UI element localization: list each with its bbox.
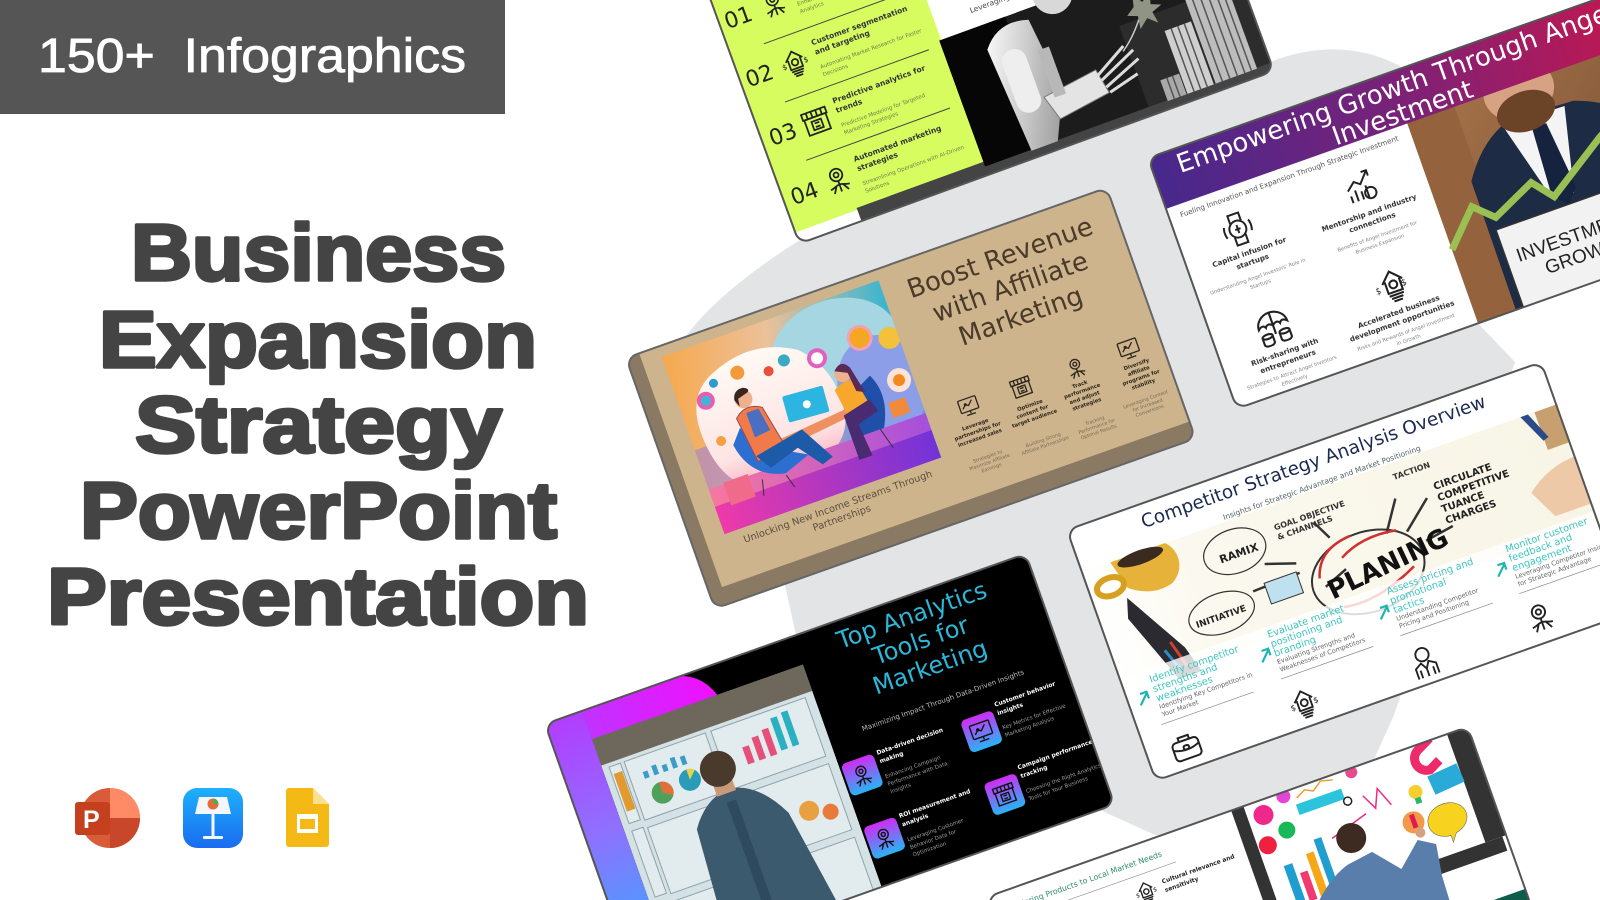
item: mentorship: Benefits of Angel Investment for	[1337, 220, 1419, 254]
item: evaluate market: positioning and	[1269, 615, 1344, 650]
row 02: Customer segmentation	[810, 4, 909, 47]
item: evaluate market: branding	[1273, 635, 1318, 660]
slide title: Boost Revenue	[903, 212, 1097, 305]
item: campaign performance	[981, 738, 1105, 816]
main title: Strategy	[135, 380, 503, 469]
subtitle: Maximizing Impact Through Data-Driven Insights	[861, 668, 1026, 733]
row 01	[725, 0, 824, 28]
column: leverage partnerships: increased sales	[957, 428, 1003, 449]
icon: Keynote	[183, 788, 243, 848]
column: track performance: strategies	[1072, 397, 1102, 413]
item: accelerated business	[1350, 270, 1455, 351]
row 04: Streamlining Operations with AI-Driven	[862, 145, 966, 187]
item: data driven decision: making	[879, 750, 905, 765]
photo: businessman with sign	[1407, 55, 1600, 322]
item: customer behavior: insights	[996, 701, 1025, 717]
row 03: Marketing Strategies	[843, 111, 899, 136]
column: track performance: and adjust	[1069, 390, 1101, 406]
row 04: Automated marketing	[852, 124, 943, 164]
item: evaluate market: Weaknesses of Competitors	[1279, 636, 1367, 674]
subtitle: Fueling Innovation and Expansion Through Strategic Investment	[1179, 134, 1400, 219]
column: optimize content	[1008, 375, 1069, 456]
slide: competitor strategy	[1067, 360, 1600, 781]
photo: planning sketch on desk: PLANING	[1323, 523, 1453, 606]
column: track performance: performance	[1063, 382, 1102, 401]
photo: planning sketch on desk: TUANCE	[1440, 490, 1486, 515]
item: campaign performance: Campaign performance	[1017, 739, 1093, 771]
item: identify competitor: weaknesses	[1155, 674, 1214, 704]
item: campaign performance: Tools for Your Business	[1027, 776, 1089, 803]
item: accelerated business: Accelerated business	[1357, 293, 1441, 330]
item: customer behavior	[958, 680, 1071, 753]
slide: tailoring products local market	[986, 724, 1557, 900]
column: diversify programs: Diversify	[1123, 358, 1151, 372]
column: optimize content: Affiliate Partnerships	[1021, 435, 1070, 457]
icon: PowerPoint	[75, 788, 140, 848]
item: accelerated business: development opportunities	[1348, 298, 1456, 344]
item: risk sharing: Strategies to Attract Angel Investors	[1247, 355, 1338, 392]
photo: planning sketch on desk: & CHANNELS	[1276, 514, 1334, 542]
item: assess pricing: Pricing and Positioning	[1398, 598, 1470, 630]
item: data driven decision: Insights	[890, 782, 912, 795]
row 02: Decisions	[822, 64, 849, 78]
item: data driven decision	[842, 728, 948, 796]
item: evaluate market	[1261, 605, 1374, 719]
photo: man drawing on whiteboard	[1230, 724, 1557, 900]
item: mentorship: Mentorship and industry	[1320, 192, 1418, 234]
row 02: Automating Market Research for Faster	[819, 28, 923, 71]
subtitle: Insights for Strategic Advantage and Market Positioning	[1222, 444, 1422, 522]
photo: robot with growth chart	[931, 0, 1271, 167]
row 04	[792, 126, 964, 204]
photo: planning sketch on desk: RAMIX	[1218, 540, 1261, 566]
column: diversify programs: for Increased	[1132, 397, 1164, 414]
item: mentorship	[1322, 169, 1417, 254]
item: identify competitor: Identifying Key Competitors in	[1158, 671, 1254, 711]
item: data driven decision: Data-driven decision	[876, 727, 944, 757]
item: assess pricing: Assess pricing and	[1385, 557, 1475, 597]
column: leverage partnerships: partnerships for	[954, 421, 1002, 443]
column: diversify programs: Conversions	[1135, 403, 1165, 419]
column: track performance: Track	[1072, 379, 1089, 390]
item: ROI measurement: Behavior Data for	[909, 829, 958, 851]
item: customer behavior: Marketing Analysis	[1004, 716, 1055, 739]
row 02	[746, 7, 921, 86]
row 04: 04	[787, 178, 822, 211]
slide title: Top Analytics	[832, 576, 990, 655]
column: optimize content: content for	[1016, 404, 1050, 421]
item: identify competitor: Your Market	[1160, 698, 1200, 719]
photo: planning sketch on desk	[1094, 404, 1593, 679]
header badge: 150+ Infographics	[38, 30, 466, 83]
row 03: trends	[835, 97, 864, 115]
item: monitor feedback: for Strategic Advantage	[1517, 555, 1593, 588]
item: cultural relevance: Cultural relevance and	[1161, 853, 1236, 885]
item: evaluate market: Evaluate market	[1266, 603, 1346, 641]
slide title: Competitor Strategy Analysis Overview	[1138, 392, 1489, 533]
column: track performance	[1064, 358, 1117, 440]
item: identify competitor	[1140, 646, 1254, 762]
item: cultural relevance: sensitivity	[1164, 876, 1200, 894]
illustration: two people at desk	[662, 276, 953, 534]
row 03: Predictive Modeling for Targeted	[841, 93, 926, 129]
slide title: Investment	[1328, 75, 1477, 152]
item: evaluate market: Evaluating Strengths and	[1276, 631, 1356, 666]
row 04: strategies	[856, 150, 900, 173]
item: monitor feedback: engagement	[1511, 543, 1573, 574]
item: mentorship: connections	[1348, 210, 1397, 235]
item: capital infusion: Startups	[1249, 278, 1272, 291]
column: diversify programs: programs for	[1122, 369, 1161, 388]
item: customer behavior: Customer behavior	[993, 681, 1056, 709]
column: diversify programs	[1116, 337, 1168, 416]
slide title: Tools for	[868, 611, 973, 671]
row 04: Solutions	[865, 180, 891, 195]
item: data driven decision: Enhancing Campaign	[884, 755, 942, 780]
item: cultural relevance	[1133, 851, 1239, 900]
row 01: 01	[721, 2, 756, 35]
item: assess pricing: promotional	[1389, 577, 1448, 607]
slide: boost revenue affiliate	[626, 188, 1196, 609]
background grey blob	[680, 49, 1515, 835]
item: data driven decision: Performance with Data	[887, 761, 949, 788]
item: assess pricing	[1380, 557, 1493, 680]
column: optimize content: target audience	[1011, 408, 1059, 430]
column: track performance: Tracking	[1084, 415, 1105, 428]
column: optimize content: Optimize	[1017, 398, 1044, 413]
photo: planning sketch on desk: INITIATIVE	[1195, 604, 1248, 631]
item: mentorship: Business Expansion	[1355, 233, 1405, 256]
column: diversify programs: stability	[1131, 378, 1157, 392]
column: leverage partnerships: Leverage	[961, 418, 990, 433]
slide title: with Affiliate	[929, 246, 1092, 329]
translucent lower panel	[1165, 512, 1597, 680]
main title: Business	[131, 208, 506, 297]
item: monitor feedback	[1497, 518, 1600, 632]
item: accelerated business: Risks and Rewards of Angel Investment	[1357, 313, 1456, 353]
item: campaign performance: Choosing the Right Analytics	[1025, 763, 1102, 795]
item: capital infusion: Understanding Angel Investors' Role in	[1210, 257, 1307, 297]
row 02: and targeting	[813, 28, 871, 57]
photo: planning sketch on desk: GOAL OBJECTIVE	[1273, 499, 1346, 532]
item: accelerated business: in Growth	[1396, 333, 1422, 347]
column: leverage partnerships	[954, 395, 1010, 472]
slide title: Marketing	[955, 281, 1087, 353]
column: leverage partnerships: Maximize Affiliate	[969, 453, 1011, 473]
item: monitor feedback: Monitor customer	[1504, 516, 1590, 555]
slide title: Marketing	[869, 634, 991, 700]
item: monitor feedback: feedback and	[1507, 532, 1574, 565]
illustration caption: Unlocking New Income Streams Through	[742, 469, 934, 546]
photo: planning sketch on desk: COMPETITIVE	[1436, 468, 1511, 504]
slide: angel investment	[1148, 0, 1600, 416]
icon: PowerPoint: P	[83, 806, 100, 834]
main title: Expansion	[99, 295, 537, 384]
item: capital infusion: startups	[1235, 252, 1270, 271]
header band	[1148, 0, 1600, 209]
column: track performance: Performance for	[1078, 417, 1116, 436]
row 02: 02	[742, 60, 777, 93]
slide: lime AI marketing	[707, 0, 1274, 244]
item: ROI measurement: ROI measurement and	[898, 788, 972, 820]
column: diversify programs: Leveraging Content	[1122, 389, 1169, 411]
item: ROI measurement: Optimization	[912, 841, 948, 859]
photo: planning sketch on desk: CIRCULATE	[1432, 462, 1494, 493]
photo: man viewing dashboards	[592, 664, 882, 900]
column: optimize content: Building Strong	[1025, 431, 1062, 449]
column: track performance: Optimal Results	[1080, 423, 1118, 442]
item: risk sharing: Risk-sharing with	[1250, 336, 1319, 368]
row 01: Analytics	[799, 1, 825, 15]
row 03: Predictive analytics for	[831, 63, 927, 105]
column: leverage partnerships: Strategies to	[972, 449, 1003, 465]
item: risk sharing: Effectively	[1281, 373, 1309, 388]
item: identify competitor: strengths and	[1151, 662, 1219, 695]
photo: planning sketch on desk: CHARGES	[1444, 499, 1498, 527]
item: customer behavior: Key Metrics for Effective	[1002, 703, 1067, 731]
header badge	[0, 0, 505, 114]
item: ROI measurement: analysis	[901, 812, 930, 828]
icon: Google Slides	[286, 788, 329, 847]
item: assess pricing: Understanding Competitor	[1395, 586, 1480, 623]
item: campaign performance: tracking	[1020, 764, 1048, 780]
illustration caption: Partnerships	[811, 503, 873, 534]
sketch nodes	[1188, 497, 1454, 636]
main title	[47, 208, 589, 641]
main title: PowerPoint	[80, 466, 557, 555]
item: capital infusion	[1210, 211, 1306, 294]
row 03	[770, 66, 925, 144]
column: leverage partnerships: Earnings	[981, 462, 1003, 475]
item: capital infusion: Capital infusion for	[1211, 235, 1288, 269]
item: ROI measurement: Leveraging Customer	[907, 818, 965, 843]
column: diversify programs: affiliate	[1127, 365, 1151, 378]
item: identify competitor: Identify competitor	[1148, 644, 1241, 686]
slide: top analytics tools	[545, 554, 1115, 900]
item: ROI measurement	[862, 788, 985, 871]
item: assess pricing: tactics	[1392, 595, 1426, 616]
main title: Presentation	[47, 552, 589, 641]
item: risk sharing: entrepreneurs	[1259, 347, 1317, 375]
row 03: 03	[766, 119, 801, 152]
item: risk sharing	[1247, 310, 1337, 390]
photo: planning sketch on desk: TACTION	[1392, 460, 1431, 482]
